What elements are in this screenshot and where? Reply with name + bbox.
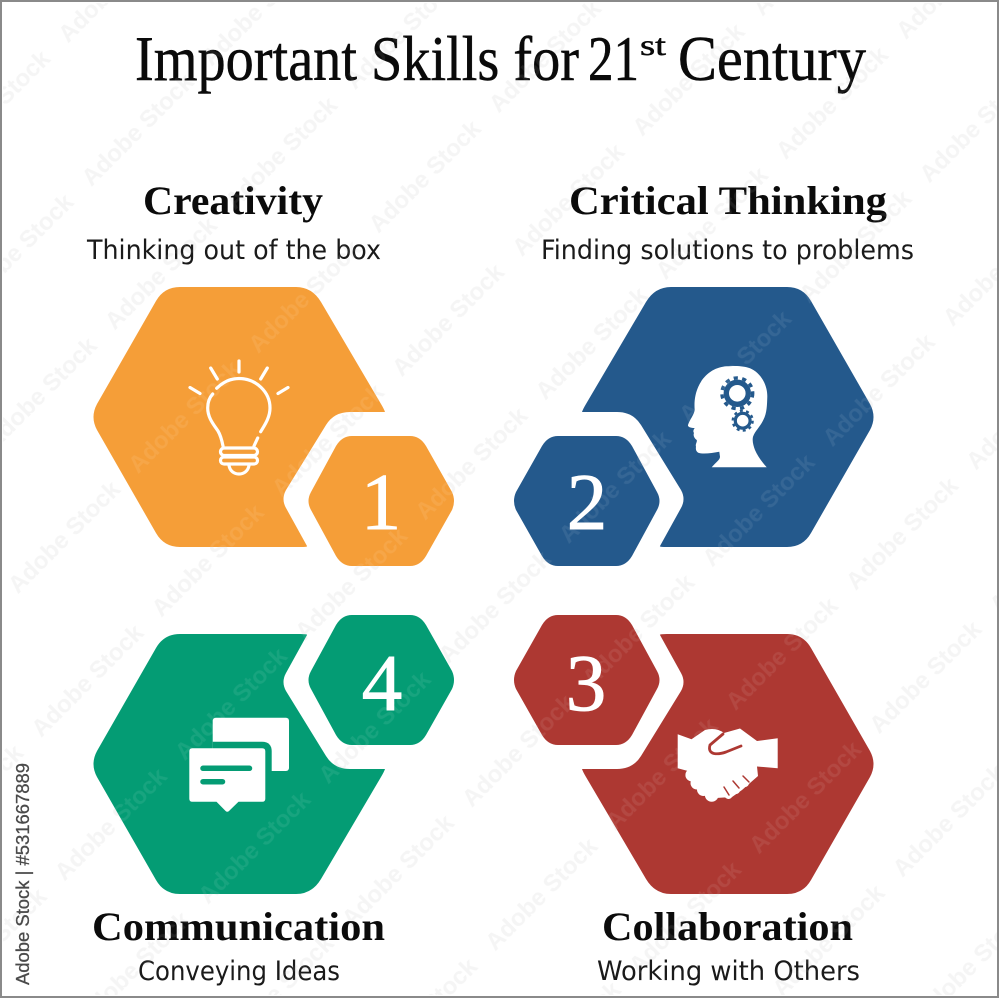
panel: creativity [86, 178, 454, 566]
panel: collaboration [514, 615, 874, 987]
small red hexagon [514, 615, 660, 745]
description: communication: Conveying Ideas [138, 956, 340, 987]
heading: collaboration: Collaboration [602, 904, 853, 949]
small orange hexagon [308, 436, 454, 566]
large blue hexagon [582, 287, 874, 547]
number 3: 3 [566, 638, 606, 728]
description: collaboration: Working with Others [597, 956, 860, 987]
icon: head with gears [688, 366, 767, 467]
number 4: 4 [362, 638, 402, 728]
panel: communication [92, 615, 454, 987]
icon: chat bubbles [189, 718, 289, 812]
description: creativity: Thinking out of the box [86, 235, 381, 266]
heading: communication: Communication [92, 904, 385, 949]
heading: creativity: Creativity [143, 178, 323, 223]
title: 21 [588, 24, 639, 94]
icon: light bulb [190, 361, 288, 474]
icon: handshake [678, 728, 778, 802]
large red hexagon [582, 634, 874, 894]
heading: critical thinking: Critical Thinking [569, 178, 887, 223]
title: Important Skills for [135, 24, 579, 94]
number 2: 2 [567, 457, 607, 547]
panel: critical thinking [514, 178, 914, 566]
large green hexagon [94, 634, 385, 894]
small green hexagon [308, 615, 454, 745]
title: Century [678, 24, 866, 94]
small blue hexagon [514, 436, 660, 566]
number 1: 1 [361, 457, 401, 547]
title: st [640, 29, 667, 62]
title [135, 24, 866, 94]
side credit text: Adobe Stock | #531667889 [13, 763, 33, 985]
large orange hexagon [94, 287, 385, 547]
description: critical thinking: Finding solutions to problems [541, 235, 914, 266]
